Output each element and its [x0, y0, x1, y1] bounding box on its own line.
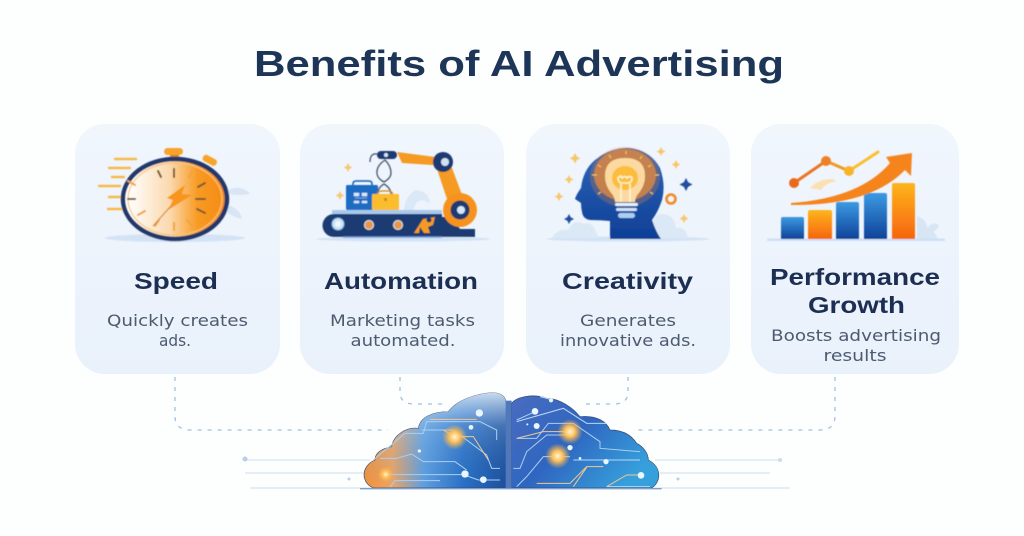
text: performance description: results	[824, 346, 886, 365]
text: speed description: ads.	[159, 331, 191, 350]
text: speed description	[107, 311, 248, 350]
circuit traces	[373, 397, 650, 487]
panel: automation	[300, 124, 504, 374]
heading: performance growth	[770, 264, 940, 318]
heading: creativity: Creativity	[562, 268, 693, 294]
text: automation description	[330, 311, 475, 350]
text: creativity description: Generates	[580, 311, 676, 330]
icon: head with light bulb	[546, 147, 710, 242]
text: speed description: Quickly creates	[107, 311, 248, 330]
icon: growth bar chart	[767, 152, 945, 241]
text: performance description	[771, 326, 941, 365]
icon: robot arm and conveyor	[316, 151, 490, 242]
glow lights	[378, 419, 583, 482]
icon: stopwatch	[99, 148, 250, 242]
circuit nodes	[418, 398, 644, 483]
text: automation description: Marketing tasks	[330, 311, 475, 330]
heading: performance growth: Growth	[808, 292, 905, 318]
heading: performance growth: Performance	[770, 264, 940, 290]
text: creativity description	[560, 311, 696, 350]
illustration: circuit brain	[360, 393, 662, 489]
heading: automation: Automation	[324, 268, 478, 294]
heading: speed: Speed	[134, 268, 218, 294]
baseline circuit lines	[242, 456, 790, 488]
text: automation description: automated.	[350, 331, 456, 350]
panel: creativity	[526, 124, 730, 374]
title: Benefits of AI Advertising	[254, 43, 784, 84]
panel: speed	[75, 124, 280, 374]
text: performance description: Boosts advertising	[771, 326, 941, 345]
text: creativity description: innovative ads.	[560, 331, 696, 350]
connectors to brain	[175, 377, 835, 430]
panel: performance growth	[751, 124, 959, 374]
